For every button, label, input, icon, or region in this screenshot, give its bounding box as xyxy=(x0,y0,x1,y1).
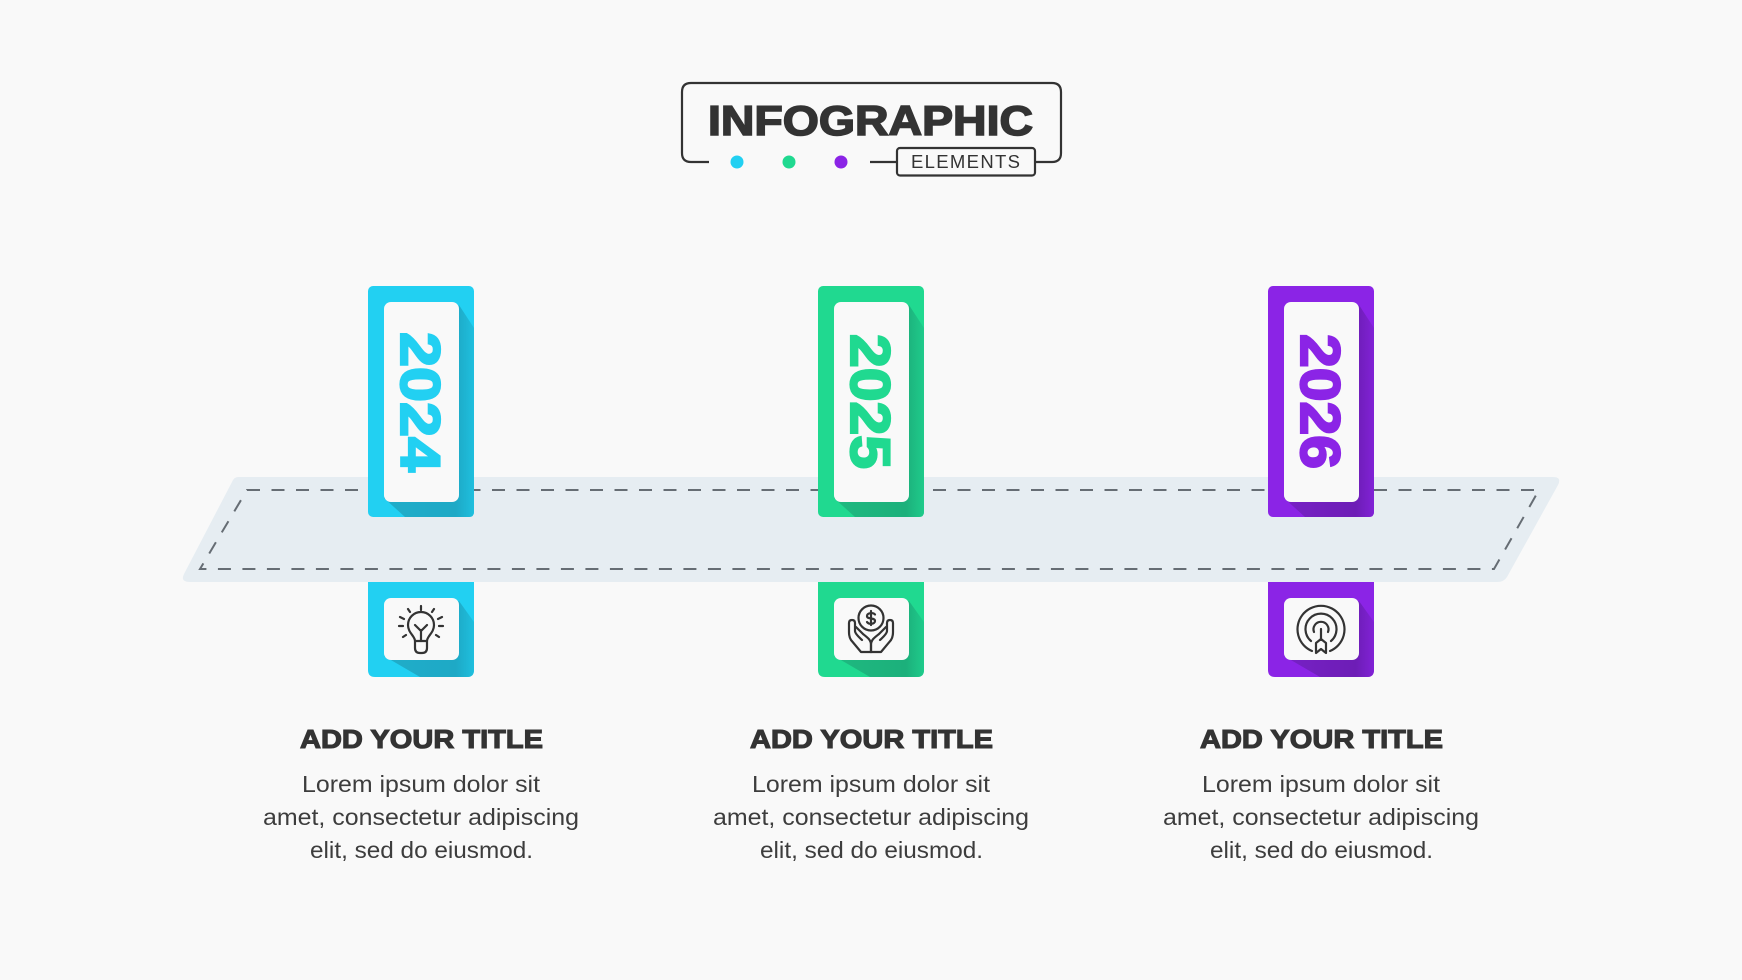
dot: cyan xyxy=(730,156,744,168)
column body xyxy=(713,771,1029,863)
column body: amet, consectetur adipiscing xyxy=(1163,804,1479,830)
column body: amet, consectetur adipiscing xyxy=(263,804,579,830)
subtitle box: ELEMENTS xyxy=(911,151,1020,172)
column body: amet, consectetur adipiscing xyxy=(713,804,1029,830)
icon: hands with coin xyxy=(849,606,893,652)
card shadow xyxy=(834,305,924,517)
year label: 2024 xyxy=(389,332,452,472)
card shadow xyxy=(384,305,474,517)
dot: green xyxy=(782,156,796,168)
card shadow xyxy=(384,601,474,677)
column heading: ADD YOUR TITLE xyxy=(300,724,543,754)
year card 2024 xyxy=(368,286,474,517)
card shadow xyxy=(1284,601,1374,677)
dot: purple xyxy=(834,156,848,168)
title badge xyxy=(682,83,1061,176)
year label: 2026 xyxy=(1289,334,1352,469)
icon: lightbulb xyxy=(399,606,443,653)
column body xyxy=(263,771,579,863)
column body: Lorem ipsum dolor sit xyxy=(302,771,541,797)
icon card: target xyxy=(1268,582,1374,677)
icon card: lightbulb xyxy=(368,582,474,677)
icon: target with arrow xyxy=(1297,606,1344,653)
column heading: ADD YOUR TITLE xyxy=(750,724,993,754)
column body: elit, sed do eiusmod. xyxy=(760,837,983,863)
timeline band xyxy=(183,477,1559,582)
year card 2025 xyxy=(818,286,924,517)
column body: elit, sed do eiusmod. xyxy=(310,837,533,863)
column body: elit, sed do eiusmod. xyxy=(1210,837,1433,863)
title: INFOGRAPHIC: INFOGRAPHIC xyxy=(708,97,1033,144)
column body: Lorem ipsum dolor sit xyxy=(1202,771,1441,797)
subtitle box xyxy=(897,148,1035,176)
card shadow xyxy=(1284,305,1374,517)
title frame xyxy=(682,83,1061,162)
card shadow xyxy=(834,601,924,677)
text block: column 2 xyxy=(713,724,1029,863)
column body xyxy=(1163,771,1479,863)
icon card: hands with coin xyxy=(818,582,924,677)
text block: column 3 xyxy=(1163,724,1479,863)
column body: Lorem ipsum dolor sit xyxy=(752,771,991,797)
column heading: ADD YOUR TITLE xyxy=(1200,724,1443,754)
text block: column 1 xyxy=(263,724,579,863)
year card 2026 xyxy=(1268,286,1374,517)
year label: 2025 xyxy=(839,334,902,469)
